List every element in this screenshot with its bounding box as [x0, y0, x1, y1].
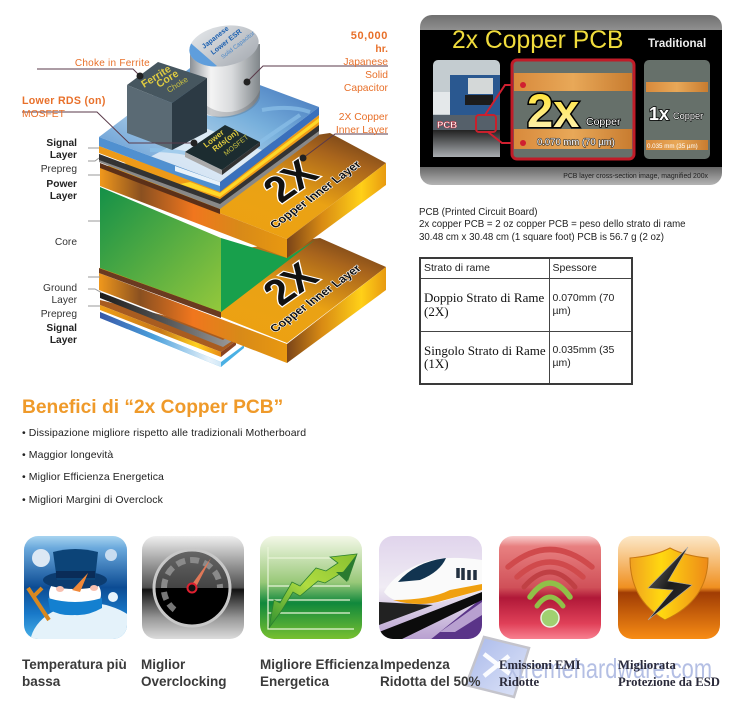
upper copper layer — [100, 133, 386, 258]
ferrite core choke: Core — [154, 68, 181, 91]
layer labels: Signal — [46, 138, 77, 149]
caption: ESD — [618, 658, 720, 688]
traditional label: Traditional — [648, 38, 706, 50]
caption: overclocking: Miglior — [141, 657, 185, 672]
caption: impedance — [380, 657, 481, 688]
layer labels: Layer — [50, 191, 77, 202]
table: copper layer thickness: (2X) — [424, 304, 449, 318]
table: copper layer thickness: (1X) — [424, 356, 449, 371]
callout: capacitor label: Solid — [365, 70, 388, 81]
callout: capacitor label: hr. — [375, 44, 388, 55]
panel title: 2x Copper PCB — [452, 27, 624, 54]
caption: energy efficiency: Migliore Efficienza — [260, 657, 379, 672]
caption: overclocking: Overclocking — [141, 674, 227, 688]
caption: EMI: Ridotte — [499, 674, 539, 688]
callout leader lines — [22, 66, 388, 306]
capacitor: Solid Capacitor — [221, 31, 256, 61]
text block: PCB description — [419, 207, 686, 243]
callout: capacitor label — [343, 30, 389, 94]
callout: MOSFET label: MOSFET — [22, 109, 66, 120]
panel caption: PCB layer cross-section image, magnified 200x — [563, 173, 709, 180]
photo: 1x copper — [644, 60, 710, 159]
capacitor: Lower ESR — [210, 28, 243, 57]
caption: ESD: Protezione da ESD — [618, 674, 720, 688]
prepreg layer — [99, 124, 319, 209]
caption: temperature: Temperatura più — [22, 657, 127, 672]
caption: energy efficiency — [260, 657, 379, 689]
callout: capacitor label: Capacitor — [344, 83, 389, 94]
caption: temperature: bassa — [22, 674, 60, 688]
text block: PCB description: PCB (Printed Circuit Board) — [419, 207, 537, 218]
2X label lower: 2X — [253, 255, 328, 313]
panel: 2x Copper PCB cross-section — [420, 15, 722, 185]
capacitor: Japanese — [201, 25, 230, 51]
callout: MOSFET label: Lower RDS (on) — [22, 95, 106, 107]
layer labels: Signal — [46, 323, 77, 334]
text block: PCB description: 2x copper PCB = 2 oz copper PCB = peso dello strato di rame — [419, 219, 686, 230]
caption: EMI — [499, 658, 580, 688]
photo: 1x copper: 1x — [649, 104, 669, 124]
photo: 2x copper: Copper — [586, 116, 621, 128]
list: benefits — [22, 427, 306, 506]
layer labels: Prepreg — [41, 309, 77, 320]
icon: snowman — [24, 536, 127, 639]
2X label upper: 2X — [253, 152, 328, 210]
diagram: PCB layer stack — [22, 20, 388, 367]
heading: benefits: Benefici di “2x Copper PCB” — [22, 397, 283, 418]
MOSFET chip: Lower — [202, 128, 226, 150]
table: copper layer thickness: Strato di rame — [424, 262, 490, 274]
caption: ESD: Migliorata — [618, 658, 676, 672]
caption: energy efficiency: Energetica — [260, 674, 329, 688]
table: copper layer thickness: Doppio Strato di Rame — [424, 290, 544, 305]
signal layers — [99, 115, 319, 199]
MOSFET chip: MOSFET — [223, 134, 251, 158]
list: benefits: • Miglior Efficienza Energetica — [22, 471, 164, 483]
lower copper layer — [99, 238, 386, 363]
lower thin layers — [100, 292, 244, 367]
photo: 1x copper: 0.035 mm (35 µm) — [647, 143, 698, 150]
top blue board — [99, 62, 319, 192]
layer labels: Core — [55, 237, 77, 248]
list: benefits: • Dissipazione migliore rispetto alle tradizionali Motherboard — [22, 427, 306, 439]
photo: 1x copper: Copper — [673, 111, 703, 121]
caption: impedance: Ridotta del 50% — [380, 674, 481, 688]
table: copper layer thickness: 0.035mm (35 µm) — [552, 344, 614, 369]
caption: temperature — [22, 657, 127, 688]
callout: choke label: Choke in Ferrite — [75, 58, 150, 69]
MOSFET chip — [185, 125, 260, 175]
photo: PCB closeup — [433, 60, 522, 157]
table: copper layer thickness: 0.070mm (70 µm) — [552, 292, 614, 316]
callout: copper label: 2X Copper — [339, 112, 389, 123]
2X label upper: Copper Inner Layer — [267, 158, 364, 231]
2X label lower: Copper Inner Layer — [267, 262, 364, 335]
icon: gauge — [142, 536, 244, 639]
layer labels: Power — [46, 179, 77, 190]
list: benefits: • Maggior longevità — [22, 449, 113, 461]
capacitor — [189, 25, 260, 118]
photo: PCB closeup: PCB — [437, 120, 457, 131]
icon: bullet train — [379, 536, 482, 640]
core green block — [100, 187, 315, 312]
photo: 2x copper: 0.070 mm (70 µm) — [537, 137, 615, 148]
callout: capacitor label: 50,000 — [351, 30, 388, 42]
table: copper layer thickness: Spessore — [552, 262, 597, 274]
layer labels — [41, 138, 78, 346]
layer labels: Layer — [50, 335, 77, 346]
layer labels: Layer — [50, 150, 77, 161]
icon: EMI waves — [499, 536, 601, 639]
photo: 2x copper — [512, 60, 634, 159]
watermark: xtremehardware logo — [466, 637, 712, 697]
table: copper layer thickness: Singolo Strato di Rame — [424, 343, 546, 358]
ferrite core choke: Choke — [165, 75, 190, 95]
MOSFET chip: Rds(on) — [211, 128, 240, 154]
ferrite core choke — [127, 62, 207, 150]
photo: 2x copper: 2x — [527, 84, 579, 137]
callout: copper label — [336, 112, 389, 136]
callout: copper label: Inner Layer — [336, 125, 389, 136]
layer labels: Ground — [43, 283, 77, 294]
layer labels: Layer — [52, 295, 78, 306]
caption: EMI: Emissioni EMI — [499, 658, 580, 672]
layer labels: Prepreg — [41, 164, 77, 175]
icon: shield with lightning — [618, 536, 720, 639]
ferrite core choke: Ferrite — [139, 63, 173, 91]
caption: impedance: Impedenza — [380, 657, 450, 672]
icon: green arrow chart — [260, 536, 362, 639]
callout: MOSFET label — [22, 95, 106, 120]
text block: PCB description: 30.48 cm x 30.48 cm (1 square foot) PCB is 56.7 g (2 oz) — [419, 232, 664, 243]
callout: capacitor label: Japanese — [343, 57, 388, 68]
table: copper layer thickness — [419, 257, 633, 385]
list: benefits: • Migliori Margini di Overclock — [22, 494, 163, 506]
caption: overclocking — [141, 657, 227, 689]
